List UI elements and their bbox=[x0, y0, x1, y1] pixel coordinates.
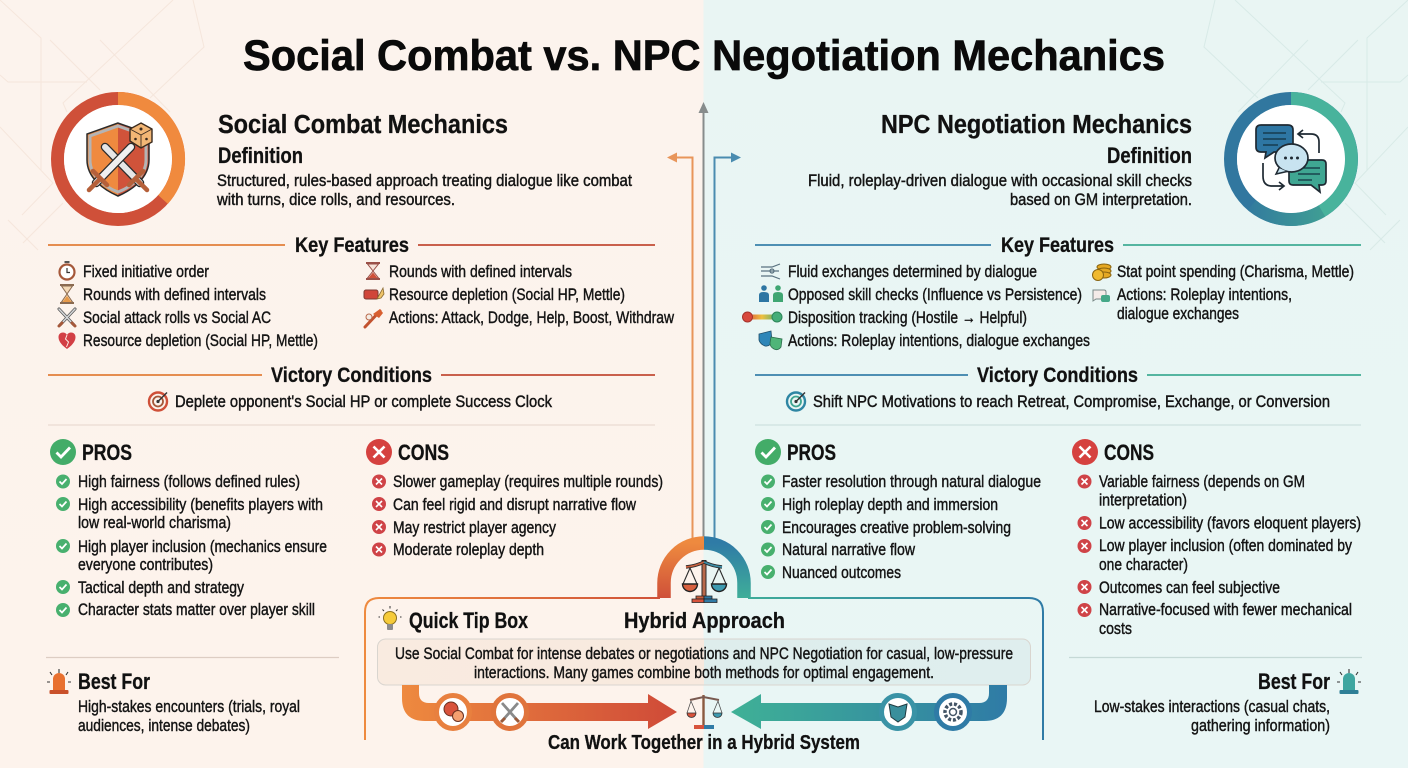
text: con item: May restrict player agency bbox=[393, 519, 557, 537]
panel: NPC negotiation bbox=[742, 98, 1362, 735]
text: rounds: Rounds with defined intervals bbox=[83, 286, 266, 304]
text: resource depletion: Resource depletion (Social HP, Mettle) bbox=[83, 332, 318, 350]
text: rounds: Rounds with defined intervals bbox=[389, 263, 572, 281]
text: pro item: High player inclusion (mechanics ensure bbox=[78, 538, 327, 556]
icon: small scales bbox=[687, 695, 722, 729]
arrow: blue to NPC negotiation bbox=[714, 152, 741, 540]
icon: check bbox=[761, 565, 775, 579]
icon: crossed swords bbox=[59, 309, 75, 326]
heading: key features: Key Features bbox=[295, 233, 409, 257]
icon: teal siren bbox=[1337, 669, 1361, 694]
text: actions: dialogue exchanges bbox=[1117, 305, 1239, 323]
icon: coins bbox=[1092, 264, 1111, 280]
text: social attack: Social attack rolls vs Social AC bbox=[83, 309, 271, 327]
icon: stopwatch bbox=[60, 262, 74, 280]
text: con item: costs bbox=[1099, 620, 1132, 638]
icon: cross bbox=[1078, 474, 1092, 488]
icon: broken heart bbox=[58, 333, 76, 349]
icon: theatre masks bbox=[759, 331, 782, 350]
icon: hybrid arch bbox=[664, 543, 744, 598]
text: con item: one character) bbox=[1099, 556, 1188, 574]
icon: cons cross bbox=[1072, 439, 1098, 465]
icon: cross bbox=[372, 542, 386, 556]
text: best for: audiences, intense debates) bbox=[78, 717, 250, 735]
text: pro item: Character stats matter over player skill bbox=[78, 601, 315, 619]
text: con item: interpretation) bbox=[1099, 492, 1187, 510]
list: key features left bbox=[58, 262, 318, 350]
text: victory condition: Shift NPC Motivations to reach Retreat, Compromise, Exchange, or Conversion bbox=[813, 393, 1330, 411]
title: Social Combat vs. NPC Negotiation Mechanics bbox=[243, 32, 1165, 80]
heading: victory conditions: Victory Conditions bbox=[977, 363, 1138, 387]
list: key features left bbox=[742, 263, 1090, 350]
panel: best for NPC negotiation bbox=[1094, 669, 1361, 735]
text: best for bbox=[1094, 698, 1330, 735]
text: con item: Outcomes can feel subjective bbox=[1099, 579, 1280, 597]
heading: best for: Best For bbox=[78, 669, 150, 694]
text: best for: gathering information) bbox=[1191, 717, 1330, 735]
text: pro item: Faster resolution through natural dialogue bbox=[782, 473, 1041, 491]
heading: pros: PROS bbox=[787, 440, 836, 465]
text: victory condition: Deplete opponent's Social HP or complete Success Clock bbox=[175, 393, 553, 411]
text: con item bbox=[1099, 473, 1305, 510]
text block: definition bbox=[216, 172, 632, 209]
icon: gear badge bbox=[936, 696, 970, 728]
text: best for: High-stakes encounters (trials, royal bbox=[78, 698, 300, 716]
text: actions bbox=[1117, 286, 1292, 323]
icon: chat badge bbox=[436, 696, 470, 728]
icon: action burst bbox=[365, 309, 383, 327]
icon: check bbox=[761, 542, 775, 556]
text: con item: Narrative-focused with fewer mechanical bbox=[1099, 601, 1352, 619]
text: pro item: Nuanced outcomes bbox=[782, 564, 901, 582]
background: right cool half bbox=[704, 0, 1408, 768]
icon: check bbox=[56, 539, 70, 553]
icon: cross bbox=[1078, 603, 1092, 617]
text block: definition: with turns, dice rolls, and resources. bbox=[216, 191, 455, 209]
text block: definition bbox=[808, 172, 1192, 209]
callout: tip text: interactions. Many games combine both methods for optimal engagement. bbox=[474, 664, 934, 682]
icon: check bbox=[56, 603, 70, 617]
heading: cons: CONS bbox=[1104, 440, 1154, 465]
panel: NPC negotiation pros bbox=[755, 439, 1041, 582]
icon: red siren bbox=[47, 669, 71, 694]
text block: definition: Fluid, roleplay-driven dialogue with occasional skill checks bbox=[808, 172, 1192, 190]
text block: definition: Structured, rules-based approach treating dialogue like combat bbox=[217, 172, 632, 190]
caption: hybrid system: Can Work Together in a Hybrid System bbox=[548, 732, 860, 754]
icon: cross bbox=[372, 497, 386, 511]
icon: chat bubbles bbox=[1093, 290, 1110, 302]
icon: cross bbox=[1078, 516, 1092, 530]
list: key features right bbox=[1092, 263, 1354, 323]
heading: hybrid approach: Hybrid Approach bbox=[624, 608, 785, 633]
arrow: orange to social combat bbox=[667, 152, 692, 540]
text: con item bbox=[1099, 601, 1352, 638]
text: con item: Low player inclusion (often dominated by bbox=[1099, 537, 1353, 555]
icon: social combat badge bbox=[58, 98, 179, 220]
text: con item bbox=[1099, 537, 1353, 574]
text: opposed checks: Opposed skill checks (Influence vs Persistence) bbox=[788, 286, 1082, 304]
icon: check bbox=[761, 497, 775, 511]
text: pro item: Natural narrative flow bbox=[782, 541, 915, 559]
text: actions: Actions: Roleplay intentions, dialogue exchanges bbox=[788, 332, 1090, 350]
icon: check bbox=[56, 580, 70, 594]
heading: definition: Definition bbox=[218, 143, 303, 168]
icon: swords badge bbox=[494, 696, 526, 728]
heading: victory conditions: Victory Conditions bbox=[271, 363, 432, 387]
icon: target bbox=[149, 392, 167, 410]
icon: check bbox=[761, 520, 775, 534]
icon: depleted battery bbox=[364, 288, 384, 299]
heading: cons: CONS bbox=[398, 440, 449, 465]
icon: large scales bbox=[682, 560, 726, 602]
text: pro item: low real-world charisma) bbox=[78, 514, 231, 532]
icon: check bbox=[761, 474, 775, 488]
callout: tip text: Use Social Combat for intense debates or negotiations and NPC Negotiation for casual, low-pressure bbox=[395, 645, 1013, 663]
text: fluid exchanges: Fluid exchanges determined by dialogue bbox=[788, 263, 1037, 281]
text: resource depletion: Resource depletion (Social HP, Mettle) bbox=[389, 286, 625, 304]
list: key features right bbox=[364, 263, 674, 327]
text: actions: Actions: Roleplay intentions, bbox=[1117, 286, 1292, 304]
text: stat point spending: Stat point spending (Charisma, Mettle) bbox=[1117, 263, 1354, 281]
text: con item: Slower gameplay (requires multiple rounds) bbox=[393, 473, 663, 491]
panel: social combat pros bbox=[50, 439, 327, 619]
text: pro item: everyone contributes) bbox=[78, 556, 213, 574]
heading: NPC negotiation mechanics: NPC Negotiation Mechanics bbox=[881, 111, 1192, 139]
icon: target bbox=[787, 392, 805, 410]
panel: NPC negotiation cons bbox=[1072, 439, 1361, 638]
icon: light bulb bbox=[378, 606, 402, 630]
icon: cross bbox=[372, 520, 386, 534]
text: best for bbox=[78, 698, 300, 735]
panel: best for social combat bbox=[47, 669, 300, 735]
icon: pros check bbox=[755, 439, 781, 465]
icon: mask badge bbox=[882, 696, 914, 728]
arrow: NPC negotiation into hybrid bbox=[731, 685, 1007, 729]
icon: two people bbox=[759, 285, 783, 302]
panel: social combat bbox=[46, 98, 674, 735]
icon: cross bbox=[1078, 580, 1092, 594]
box outline bbox=[365, 598, 1043, 740]
heading: definition: Definition bbox=[1107, 143, 1192, 168]
text: pro item bbox=[78, 496, 323, 532]
text: pro item bbox=[78, 538, 327, 574]
icon: NPC negotiation badge bbox=[1230, 98, 1352, 220]
text: pro item: High fairness (follows defined rules) bbox=[78, 473, 300, 491]
heading: quick tip box: Quick Tip Box bbox=[409, 608, 529, 633]
icon: cross bbox=[1078, 539, 1092, 553]
icon: flow lines bbox=[761, 264, 780, 279]
text: pro item: High accessibility (benefits players with bbox=[78, 496, 323, 514]
text: con item: Variable fairness (depends on GM bbox=[1099, 473, 1305, 491]
heading: key features: Key Features bbox=[1001, 233, 1114, 257]
text: con item: Low accessibility (favors eloquent players) bbox=[1099, 514, 1361, 532]
text: actions: Actions: Attack, Dodge, Help, Boost, Withdraw bbox=[389, 309, 674, 327]
text: best for: Low-stakes interactions (casual chats, bbox=[1094, 698, 1330, 716]
text: con item: Moderate roleplay depth bbox=[393, 541, 544, 559]
icon: pros check bbox=[50, 439, 76, 465]
icon: disposition meter bbox=[742, 312, 782, 322]
arrow: social combat into hybrid bbox=[402, 685, 677, 729]
heading: social combat mechanics: Social Combat Mechanics bbox=[218, 111, 508, 139]
icon: check bbox=[56, 474, 70, 488]
icon: cross bbox=[372, 474, 386, 488]
panel: social combat cons bbox=[366, 439, 663, 559]
icon: check bbox=[56, 497, 70, 511]
icon: hourglass bbox=[60, 285, 74, 303]
panel: hybrid approach bbox=[365, 543, 1043, 754]
text: pro item: Tactical depth and strategy bbox=[78, 579, 245, 597]
heading: best for: Best For bbox=[1258, 669, 1330, 694]
text: fixed initiative: Fixed initiative order bbox=[83, 263, 209, 281]
callout: tip text bbox=[378, 639, 1030, 685]
center arrows bbox=[667, 102, 741, 540]
icon: red hourglass bbox=[366, 263, 380, 279]
text: con item: Can feel rigid and disrupt narrative flow bbox=[393, 496, 636, 514]
text: disposition tracking: Disposition tracking (Hostile → Helpful) bbox=[788, 309, 1027, 327]
icon: cons cross bbox=[366, 439, 392, 465]
background: left warm half bbox=[0, 0, 704, 768]
text: pro item: High roleplay depth and immersion bbox=[782, 496, 998, 514]
heading: pros: PROS bbox=[82, 440, 132, 465]
text block: definition: based on GM interpretation. bbox=[1010, 191, 1192, 209]
arrow: center grey up bbox=[698, 102, 708, 540]
text: pro item: Encourages creative problem-solving bbox=[782, 519, 1011, 537]
